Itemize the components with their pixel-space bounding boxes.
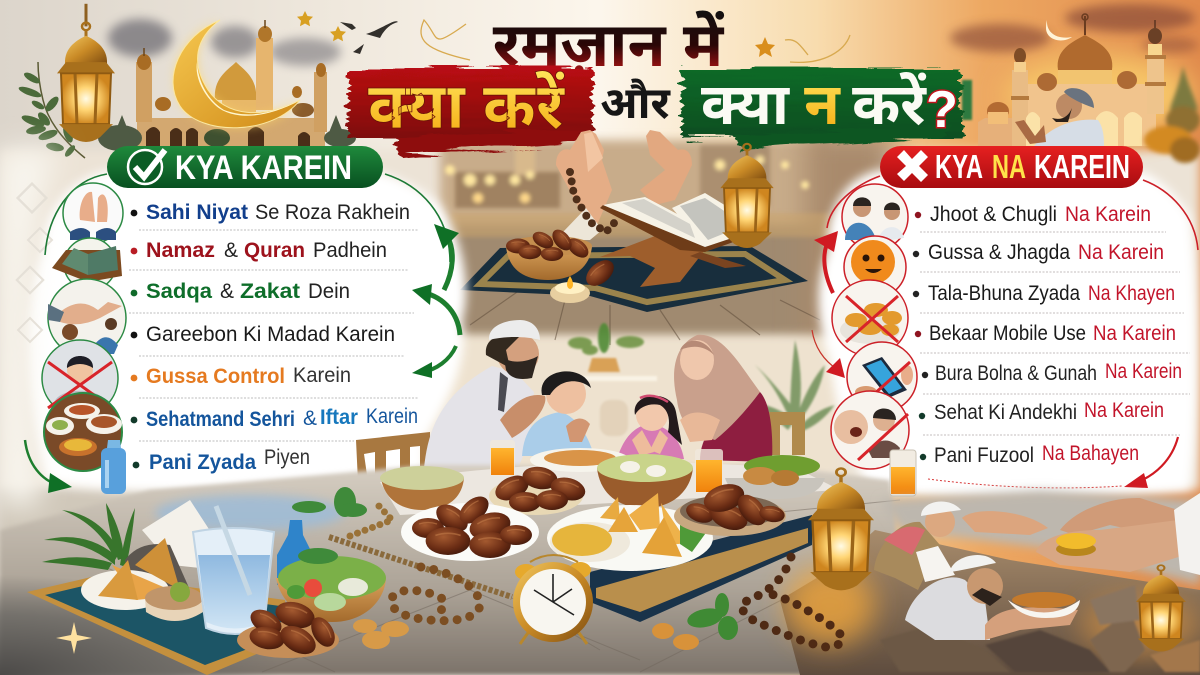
header pill: NA (992, 148, 1026, 185)
alarm clock (513, 555, 593, 644)
juice glasses (490, 440, 723, 493)
rug border strip (329, 537, 512, 597)
text: kya na karein: ? (926, 81, 958, 139)
prayer beads lower (742, 557, 842, 647)
header pill: KYA (935, 148, 983, 185)
icon: crossed out shouting faces (831, 391, 909, 469)
list item: Iftar (320, 406, 358, 429)
left mosque (98, 20, 356, 151)
mother (674, 335, 772, 462)
bottom left meal (27, 500, 480, 675)
salad bowl centre (597, 454, 693, 508)
background plant centre (568, 323, 657, 436)
chair right (768, 412, 805, 455)
nuts lower (652, 623, 699, 650)
rocks (880, 585, 1200, 672)
lantern top left (57, 4, 115, 142)
list item: Sehatmand Sehri (146, 408, 295, 431)
moon (1046, 20, 1072, 40)
girl (617, 396, 684, 459)
table food group (292, 448, 825, 571)
rice bowl back left (380, 466, 464, 510)
list item: Sadqa (146, 280, 212, 303)
title line one: रमज़ान में (493, 10, 725, 80)
text: kya na karein: न (804, 72, 841, 137)
list item (913, 241, 1164, 264)
giving hands with coins (1036, 493, 1200, 575)
header pill: KAREIN (1034, 148, 1130, 185)
list item (922, 360, 1182, 385)
panel outline (827, 176, 1198, 250)
list item: Sehat Ki Andekhi (934, 401, 1077, 424)
distant city lights (445, 143, 830, 237)
list item: Zakat (240, 280, 300, 303)
header pill (880, 146, 1143, 188)
list item: Dein (308, 280, 350, 303)
mint leaves (686, 593, 738, 640)
list item: Na Khayen (1088, 282, 1175, 305)
list item: Bekaar Mobile Use (929, 322, 1086, 345)
list item (913, 282, 1175, 305)
leaves top left (18, 62, 85, 158)
tree (1144, 66, 1200, 163)
green brush banner (682, 68, 962, 150)
icon: quran (52, 238, 122, 290)
list item: Se Roza Rakhein (255, 201, 410, 224)
plate dates back (489, 464, 588, 515)
list item (920, 442, 1139, 467)
icon: crossed out mobile (847, 342, 917, 412)
juice glass right panel (890, 450, 916, 496)
small bowl (145, 598, 203, 621)
samosa plate (81, 570, 169, 610)
list item: Na Karein (1084, 399, 1164, 422)
list item: Pani Zyada (149, 451, 256, 474)
list item: & (224, 239, 238, 262)
ornaments around title (340, 20, 850, 62)
list item: Bura Bolna & Gunah (935, 362, 1097, 385)
sparkle (56, 622, 92, 654)
text: aur: और (600, 78, 672, 128)
bottle (277, 520, 313, 585)
plate dates right (674, 479, 786, 536)
stars top left (297, 11, 346, 41)
rug (27, 575, 290, 675)
list item: Padhein (313, 239, 387, 262)
bottom right scene: stone (780, 490, 1200, 675)
list item: Quran (244, 239, 305, 262)
list item: Na Karein (1065, 203, 1151, 226)
green arrow curved left (412, 284, 460, 335)
list item: Gareebon Ki Madad Karein (146, 323, 395, 346)
list item: Na Karein (1078, 241, 1164, 264)
text: kya na karein: करें (852, 72, 927, 137)
lantern bottom right (1136, 565, 1186, 652)
lantern on table (808, 468, 874, 590)
icon: angry emoji (844, 236, 906, 298)
list item (915, 322, 1176, 345)
father (424, 320, 545, 468)
icon: healthy meal (44, 393, 122, 471)
list item (131, 405, 418, 431)
list item: Gussa & Jhagda (928, 241, 1070, 264)
list item: Piyen (264, 446, 310, 469)
family praying (356, 320, 805, 482)
lattice pattern (17, 184, 52, 342)
list item: Tala-Bhuna Zyada (928, 282, 1080, 305)
icon: two men arguing (842, 184, 908, 250)
salad bowl (276, 578, 386, 622)
header pill (107, 146, 383, 188)
green arrow down left (412, 346, 456, 378)
praying man (1034, 120, 1104, 148)
header pill: KYA KAREIN (175, 149, 352, 187)
floor boards (470, 290, 820, 345)
date bowl on rug (506, 226, 619, 291)
open quran on stand (600, 193, 762, 287)
crescent moon (173, 20, 300, 128)
list item (919, 399, 1164, 424)
child helper (874, 501, 1048, 590)
panel outline (45, 174, 450, 262)
icon: crossed out fried food (832, 280, 908, 356)
plate samosa (547, 493, 713, 571)
red dotted arrow (812, 330, 845, 378)
list item: Na Karein (1093, 322, 1176, 345)
right mosque and praying man (962, 14, 1200, 163)
text: kya karein: क्या करें (368, 70, 566, 142)
rug under food (590, 515, 812, 622)
prayer beads in hand (570, 172, 615, 232)
icon: praying hands (63, 183, 123, 243)
list item: Pani Fuzool (934, 444, 1034, 467)
list item: Karein (293, 364, 351, 387)
list item: Karein (366, 405, 418, 428)
man receiving food (905, 555, 1080, 640)
plate biryani (530, 448, 630, 472)
list item: & (220, 280, 234, 303)
son (522, 371, 594, 456)
list item (131, 364, 351, 388)
list item (131, 280, 350, 303)
plate with greens (725, 455, 825, 499)
water glass (193, 528, 274, 634)
green arrow bottom left (25, 440, 72, 493)
list item (133, 446, 310, 474)
dates plate (237, 622, 339, 658)
row dividers (129, 230, 419, 441)
list item (131, 239, 387, 262)
left panel: kya karein (0, 146, 466, 505)
row dividers (920, 232, 1190, 435)
prayer rug centre (460, 246, 808, 312)
beads (391, 567, 480, 621)
text: kya na karein (701, 72, 958, 139)
icon: crossed out angry boy (42, 340, 118, 416)
list item: & (303, 407, 317, 430)
background plant right (750, 340, 835, 432)
icon: charity hands (48, 279, 126, 357)
list item (131, 201, 410, 224)
red brush banner (348, 68, 593, 156)
list item: Namaz (146, 239, 215, 262)
prayer hands (556, 130, 692, 240)
lantern centre (720, 144, 774, 248)
napkin (142, 500, 216, 568)
leaves and beads on table (292, 487, 392, 536)
red arrow up (814, 231, 838, 293)
list item: Sahi Niyat (146, 201, 248, 224)
nuts (353, 619, 409, 649)
list item: Gussa Control (146, 365, 285, 388)
list item: Jhoot & Chugli (930, 203, 1057, 226)
plate dates large (401, 491, 539, 561)
green arrow up (434, 224, 459, 290)
list item (915, 203, 1151, 226)
chair left (356, 432, 430, 482)
water bottle in left panel (101, 440, 126, 494)
palm (42, 503, 135, 570)
title (348, 10, 962, 156)
text: kya na karein: क्या (701, 72, 790, 137)
red arrow bottom right (1124, 437, 1178, 488)
list item: Na Bahayen (1042, 442, 1139, 465)
table (0, 462, 900, 675)
right panel: kya na karein (818, 146, 1198, 499)
list item: Na Karein (1105, 360, 1182, 383)
candle (550, 276, 590, 303)
